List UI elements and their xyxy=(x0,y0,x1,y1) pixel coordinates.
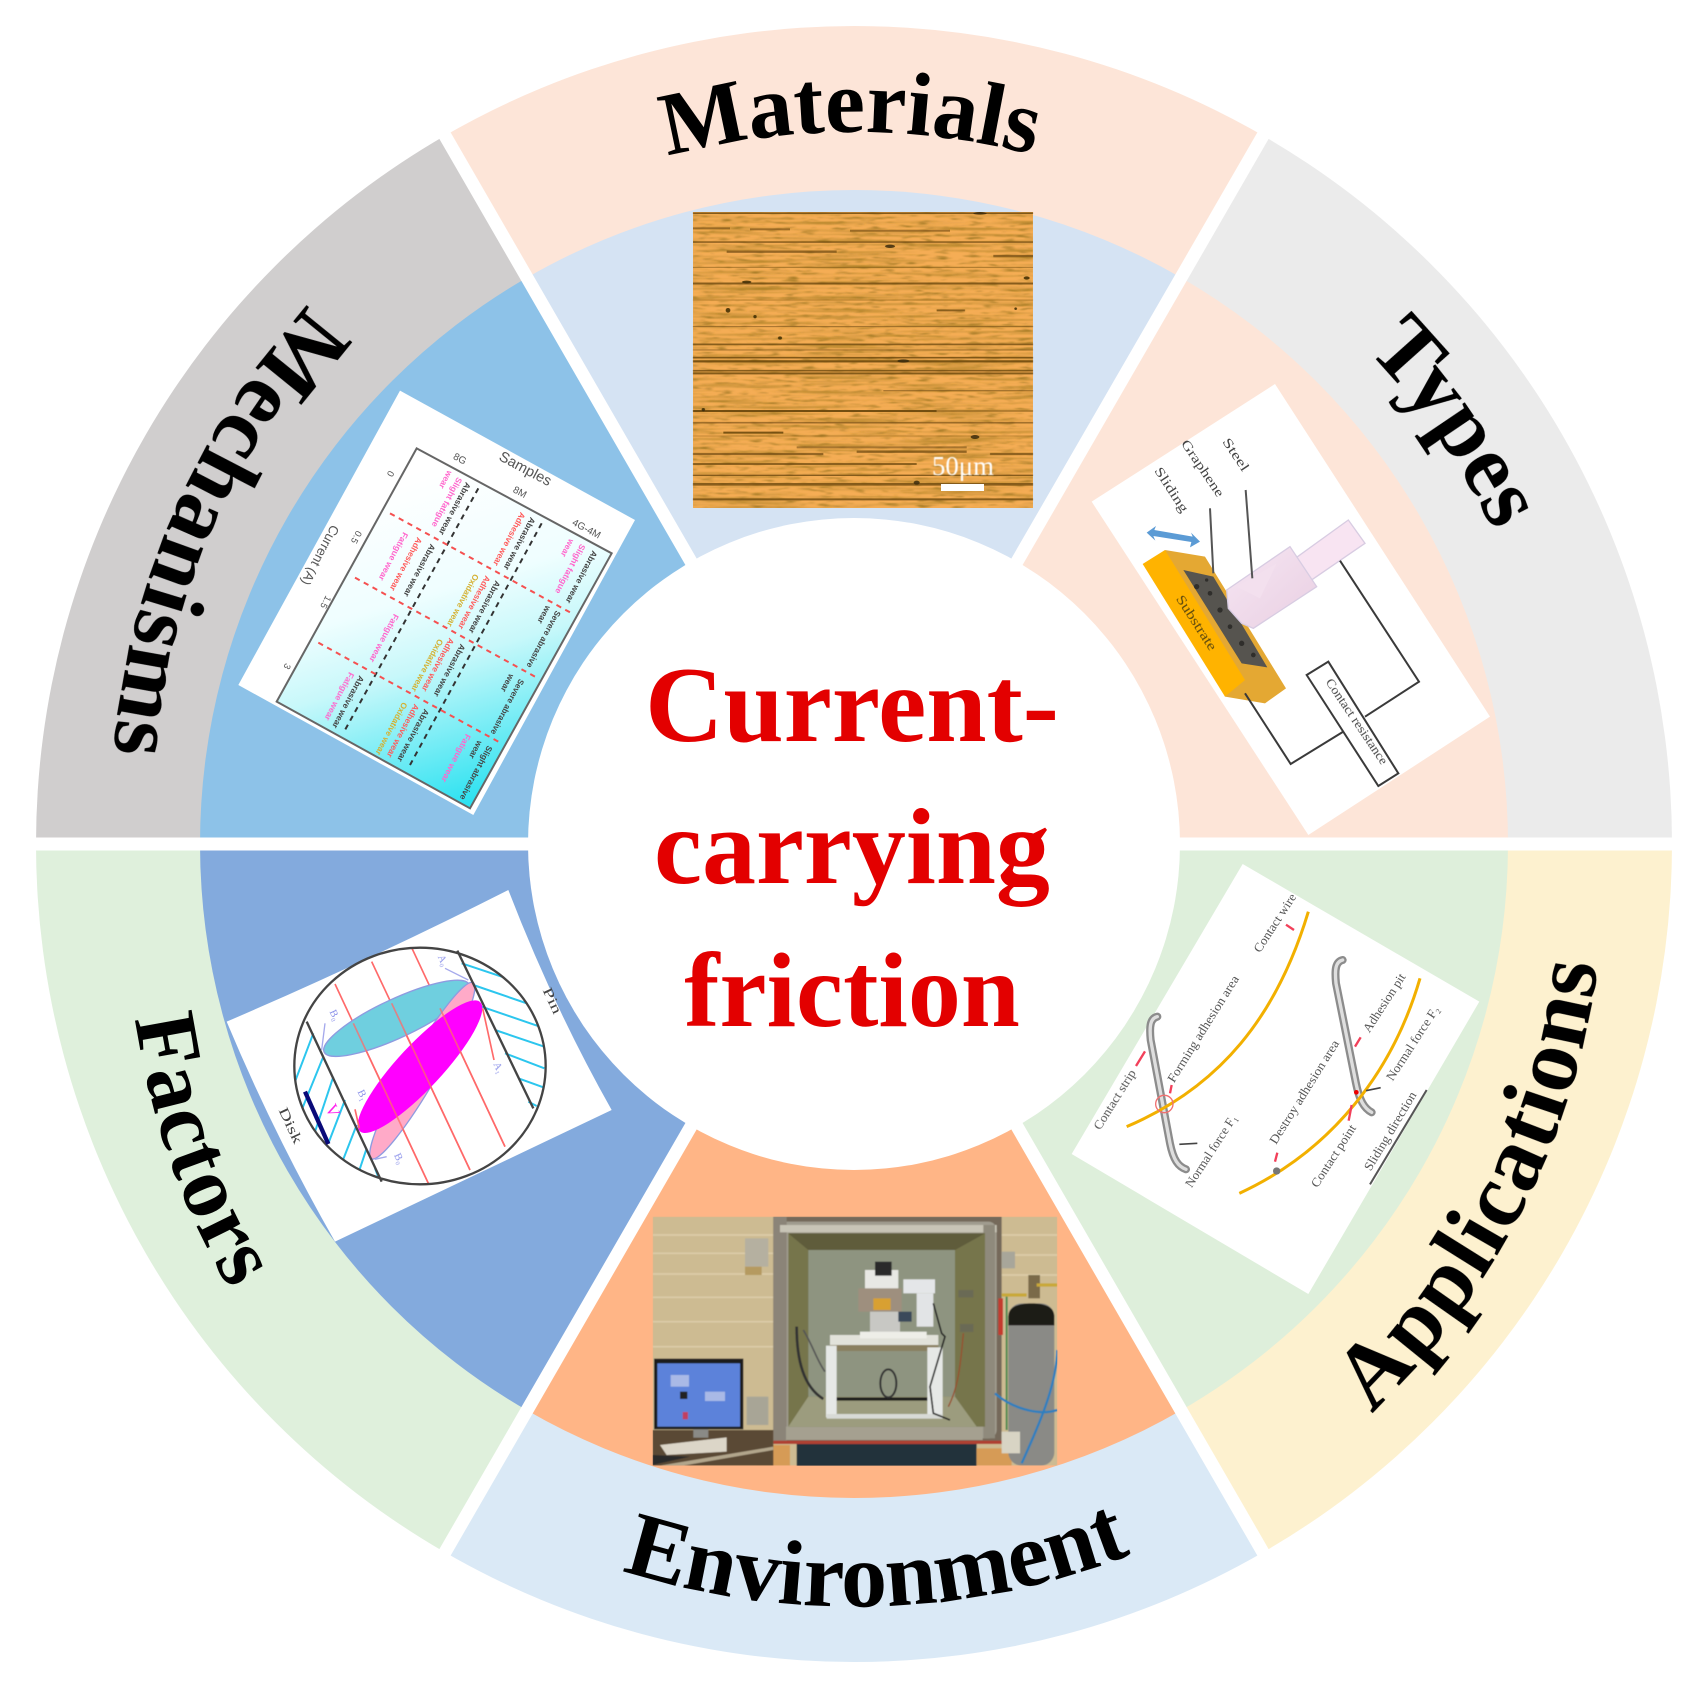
wear mode labels: Fatigue wear xyxy=(367,612,401,665)
wear mode labels: Adhesive wear xyxy=(384,702,421,760)
image: Factors contact diagram panel xyxy=(227,890,612,1242)
heading: Materials: Materials xyxy=(656,72,1038,156)
heading: Applications: Applications xyxy=(1346,963,1597,1414)
centre title: friction xyxy=(684,932,1020,1049)
schematic labels xyxy=(1091,891,1442,1190)
test rig table xyxy=(830,1335,938,1345)
heading: Factors: Factors xyxy=(135,1010,263,1284)
wear mode labels: Abrasive wear xyxy=(330,674,366,731)
wear mode labels: Abrasive wear xyxy=(466,579,503,636)
steel pin xyxy=(1227,520,1365,628)
inner ring sectors xyxy=(200,190,1508,1498)
image: Applications contact wire schematic panel xyxy=(1072,864,1479,1294)
wear mode labels: Adhesive wear xyxy=(387,536,424,593)
axis labels: Samples xyxy=(496,449,554,490)
wear mode labels: Fatigue wear xyxy=(376,531,410,583)
wear mode labels: Adhesive wear xyxy=(456,574,493,632)
diagram labels: Disk xyxy=(275,1105,305,1146)
wear mode labels: Adhesive wear xyxy=(491,511,528,568)
schematic labels: Contact strip xyxy=(1091,1067,1139,1132)
heading: Mechanisms: Mechanisms xyxy=(114,304,352,753)
gas cylinder xyxy=(1008,1303,1054,1466)
substrate block xyxy=(1143,550,1286,703)
monitor and desk xyxy=(653,1430,773,1466)
wear mode labels: wear xyxy=(535,603,554,626)
hatch lines xyxy=(295,963,544,1182)
schematic labels: Graphene xyxy=(1178,437,1228,500)
wear mode labels: Abrasive wear xyxy=(501,516,538,573)
schematic labels: Sliding xyxy=(1151,464,1192,515)
image: Mechanisms wear-map panel xyxy=(238,391,635,815)
schematic labels: Normal force F₁ xyxy=(1182,1112,1240,1190)
wear mode labels xyxy=(322,468,600,802)
wear mode labels: Fatigue wear xyxy=(439,732,473,785)
wear mode labels: Abrasive wear xyxy=(431,642,468,699)
wear mode labels: wear xyxy=(558,537,577,560)
wear mode labels: Abrasive wear xyxy=(401,542,438,599)
heading: Types: Types xyxy=(1376,310,1528,526)
velocity marker: V xyxy=(321,1101,344,1121)
wear mode labels: Adhesive wear xyxy=(419,636,456,694)
wear mode labels: Severe abrasive xyxy=(524,609,563,670)
axis labels: 8M xyxy=(511,485,528,501)
base xyxy=(797,1443,977,1467)
schematic labels: Substrate xyxy=(1173,592,1220,653)
tribometer head xyxy=(865,1270,898,1290)
image: copper surface micrograph (Materials) xyxy=(693,212,1033,508)
red grid lines xyxy=(335,948,505,1183)
contact strips xyxy=(1150,960,1372,1169)
schematic labels xyxy=(1151,435,1391,767)
wear mode labels: Slight abrasive xyxy=(458,744,495,802)
schematic labels: Steel xyxy=(1220,435,1253,474)
diagram labels: Pin xyxy=(539,985,564,1017)
central white circle xyxy=(528,518,1180,1170)
wear mode labels: wear xyxy=(498,672,517,695)
image: Factors contact diagram panel: B₀ xyxy=(391,1152,406,1166)
schematic labels: Destroy adhesion area xyxy=(1267,1037,1342,1147)
circuit wires xyxy=(1210,490,1419,786)
cables xyxy=(797,1303,963,1420)
wear mode labels: Oxidative wear xyxy=(444,572,481,629)
scale label: 50 micrometres: 50μm xyxy=(932,451,994,481)
schematic labels: Sliding direction xyxy=(1361,1089,1420,1173)
axis labels: Current (A) xyxy=(298,523,342,588)
image: Factors contact diagram panel: A₀ xyxy=(435,953,450,969)
wear mode labels: Abrasive wear xyxy=(436,481,473,538)
wear mode labels: Fatigue wear xyxy=(322,671,356,723)
centre title xyxy=(645,645,1059,1049)
centre title: carrying xyxy=(654,788,1050,907)
image: Factors contact diagram panel: B₁ xyxy=(355,1088,369,1103)
schematic labels: Adhesion pit xyxy=(1360,970,1409,1035)
diagram labels xyxy=(275,985,564,1146)
wear mode labels: Slight fatigue xyxy=(553,542,588,596)
sliding arrow xyxy=(1147,526,1200,547)
wear mode labels: Oxidative wear xyxy=(409,637,445,694)
brick wall xyxy=(653,1217,1057,1466)
axis labels xyxy=(281,449,602,671)
schematic labels: Contact wire xyxy=(1251,891,1299,955)
image: Factors contact diagram panel: A₁ xyxy=(491,1061,505,1076)
chamber frame xyxy=(773,1217,1002,1443)
heading: Environment: Environment xyxy=(623,1510,1130,1608)
small arrows xyxy=(1136,925,1361,1162)
wear mode labels: wear xyxy=(467,738,485,761)
schematic labels: Contact point xyxy=(1308,1122,1359,1190)
wear mode labels: Abrasive wear xyxy=(563,549,600,606)
schematic labels: Contact resistance xyxy=(1323,676,1391,767)
axis labels: 0.5 xyxy=(349,529,364,545)
centre title: Current- xyxy=(645,645,1059,765)
axis labels: 8G xyxy=(451,451,468,468)
schematic labels: Forming adhesion area xyxy=(1165,973,1242,1085)
wear mode labels: Oxidative wear xyxy=(373,701,410,758)
axis labels: 4G-4M xyxy=(570,517,602,541)
axis labels: 0 xyxy=(385,469,396,478)
schematic labels: Normal force F₂ xyxy=(1383,1003,1442,1083)
wear mode labels: Slight fatigue xyxy=(430,476,464,529)
wear mode labels: Severe abrasive xyxy=(488,677,526,737)
axis labels: 3 xyxy=(281,662,293,671)
chamber interior xyxy=(788,1233,985,1427)
image: Types schematic panel xyxy=(1092,384,1490,835)
image: Factors contact diagram panel: B₀ xyxy=(327,1008,341,1023)
contact ellipses xyxy=(316,967,486,1166)
image: Environment test chamber photograph xyxy=(653,1217,1057,1467)
wear mode labels: Abrasive wear xyxy=(395,707,431,764)
axis labels: 1.5 xyxy=(318,594,333,610)
wear mode labels: wear xyxy=(437,468,455,491)
contact wires xyxy=(1127,912,1420,1193)
